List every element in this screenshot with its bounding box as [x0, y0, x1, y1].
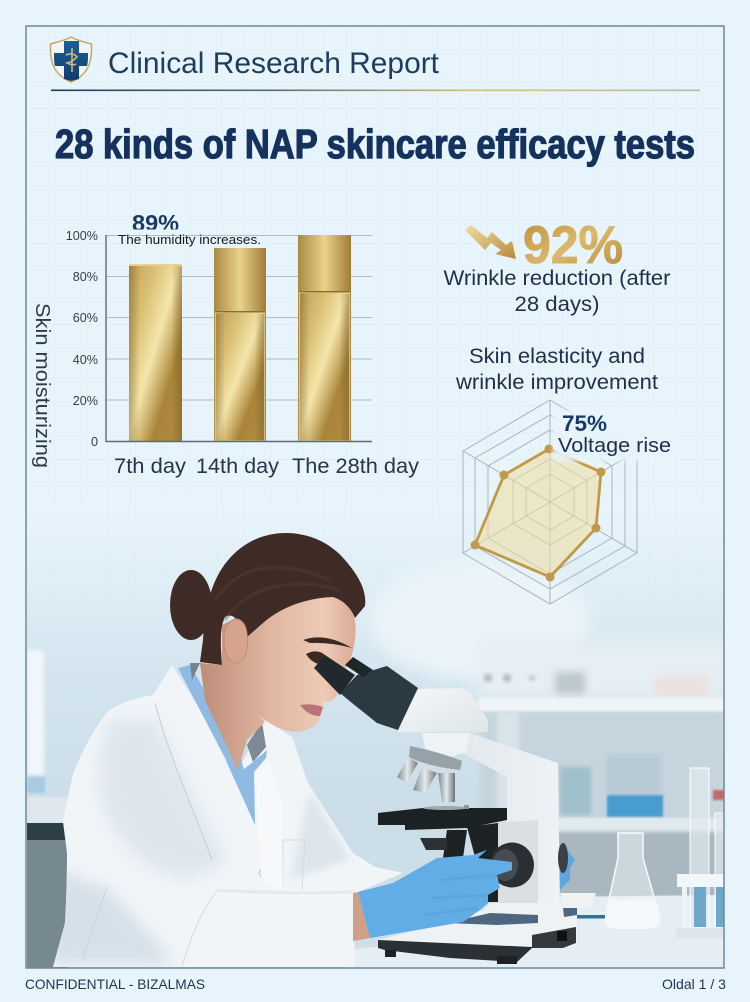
- background grid: [27, 27, 724, 647]
- microscope rear panel: [498, 820, 538, 905]
- gloved hand: [358, 850, 512, 938]
- data points: [470, 444, 606, 582]
- lab glassware: [560, 768, 725, 938]
- callout: 89% humidity: 89%: [132, 210, 179, 236]
- header rule: [51, 90, 700, 91]
- y axis labels: 60%: [73, 311, 98, 325]
- bar: 7th day: [129, 264, 182, 441]
- callout: 89% humidity: [118, 210, 261, 247]
- y axis labels: 0: [91, 435, 98, 449]
- microscope head: [398, 688, 488, 732]
- focus knob: [490, 842, 534, 888]
- wrist: [353, 892, 370, 941]
- lab coat: [50, 665, 403, 967]
- objective turret: [422, 733, 470, 758]
- chair: [27, 823, 67, 968]
- microscope arm: [463, 733, 560, 903]
- stat: wrinkle reduction: [444, 216, 670, 316]
- hair: [200, 533, 365, 665]
- microscope: [314, 655, 577, 964]
- microscope base: [378, 903, 577, 947]
- callout: 75% voltage rise: [553, 410, 677, 461]
- 92% value: 92%: [523, 216, 623, 275]
- lips: [300, 704, 323, 716]
- report title: Clinical Research Report: [108, 47, 440, 80]
- x axis labels: [114, 455, 420, 478]
- microscope stage: [467, 823, 498, 902]
- heading: skin elasticity: [455, 345, 658, 394]
- y axis labels: 80%: [73, 270, 98, 284]
- photo: scientist at microscope: [27, 500, 728, 968]
- y axis labels: 20%: [73, 394, 98, 408]
- wrinkle reduction caption: Wrinkle reduction (after: [444, 267, 670, 290]
- callout: 75% voltage rise: Voltage rise: [558, 434, 671, 457]
- footer: [25, 976, 726, 992]
- gridlines: [106, 236, 372, 400]
- stat: wrinkle reduction: 28 days): [514, 293, 600, 316]
- data polygon: [475, 449, 601, 577]
- hair bun: [170, 570, 212, 640]
- confidential note: CONFIDENTIAL - BIZALMAS: [25, 976, 205, 992]
- radar grid: [463, 400, 637, 604]
- y axis labels: 100%: [66, 229, 98, 243]
- y axis labels: [66, 229, 98, 449]
- radar chart: [463, 400, 677, 604]
- icon: medical shield logo: [50, 37, 92, 82]
- bar: 28th day: [298, 235, 351, 441]
- eyebrow and eye: [303, 637, 352, 664]
- neck and face: [200, 597, 355, 770]
- bar: 14th day: [214, 248, 266, 441]
- x axis labels: 14th day: [196, 455, 280, 478]
- y axis labels: 40%: [73, 353, 98, 367]
- lab bench: [345, 895, 724, 968]
- y axis title: Skin moisturizing: [31, 303, 54, 468]
- x axis labels: The 28th day: [292, 455, 420, 478]
- lab backdrop: [27, 564, 724, 968]
- bar chart: skin moisturizing: [31, 210, 420, 478]
- ear: [224, 619, 248, 663]
- callout: 89% humidity: The humidity increases.: [118, 233, 261, 247]
- heading: skin elasticity: wrinkle improvement: [455, 371, 658, 394]
- binocular body: [340, 666, 418, 730]
- icon: downward zigzag arrow: [465, 225, 516, 259]
- eyepieces: [314, 655, 355, 695]
- callout: 75% voltage rise: 75%: [562, 411, 607, 436]
- rear glove: [560, 850, 575, 890]
- header: [50, 37, 440, 82]
- page number: Oldal 1 / 3: [662, 976, 726, 992]
- heading: skin elasticity: Skin elasticity and: [469, 345, 645, 368]
- axes: [106, 235, 372, 442]
- x axis labels: 7th day: [114, 455, 187, 478]
- shirt and inner collar: [178, 663, 267, 825]
